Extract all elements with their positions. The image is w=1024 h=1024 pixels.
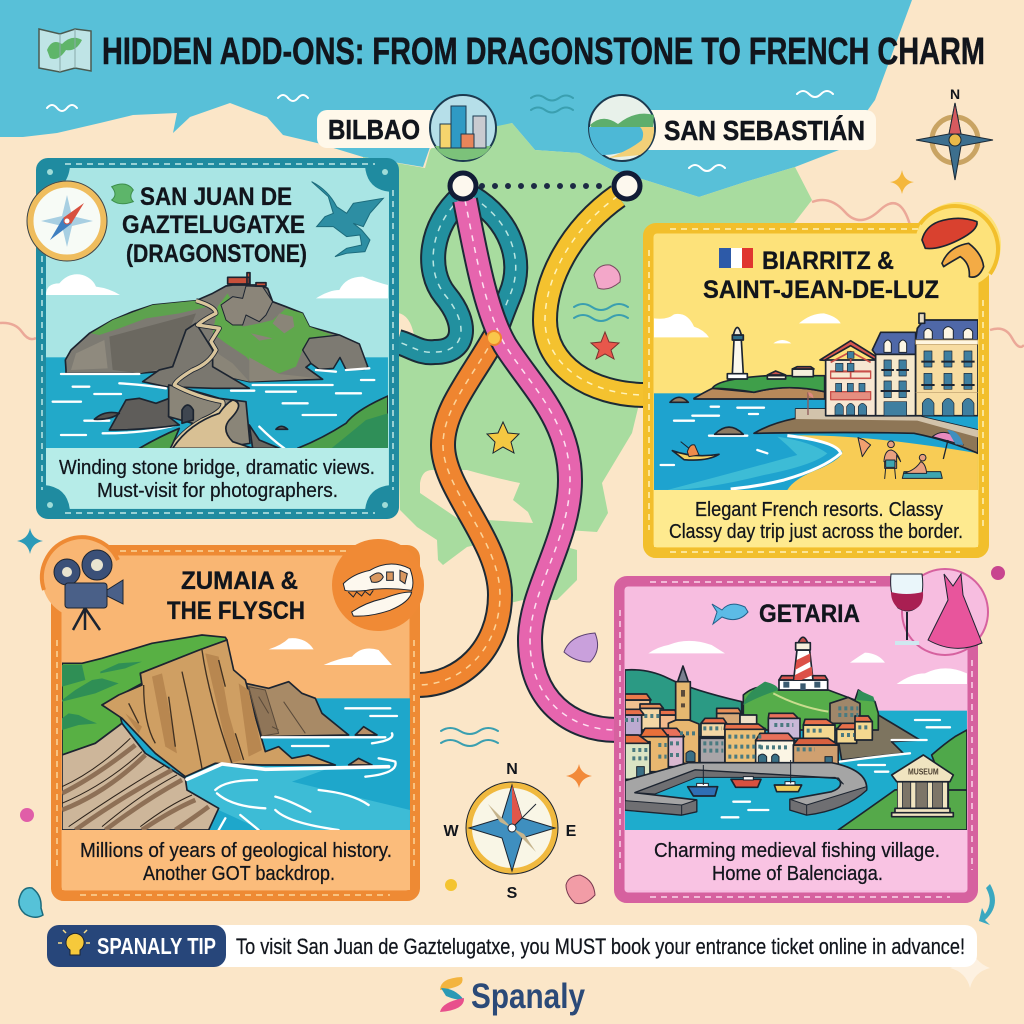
heading: SAN JUAN DE — [140, 183, 292, 211]
illustration: fishing village — [625, 637, 967, 831]
roads — [398, 196, 646, 730]
heading — [703, 247, 939, 304]
caption band — [625, 830, 967, 890]
icon: folded map — [39, 29, 91, 72]
illustration: island and bridge — [46, 273, 388, 451]
caption band — [46, 448, 388, 508]
heading — [122, 183, 307, 268]
heading: SAINT-JEAN-DE-LUZ — [703, 276, 939, 304]
panel: Biarritz and Saint-Jean-de-Luz — [644, 202, 1001, 557]
region border lines — [0, 200, 1024, 347]
caption: Home of Balenciaga. — [712, 863, 883, 885]
illustration: French resort — [654, 313, 978, 490]
tip label: SPANALY TIP — [97, 933, 216, 959]
icon: teal dragon — [312, 182, 383, 257]
sea — [0, 0, 912, 197]
icon: small green dragon — [112, 184, 133, 204]
panel: Getaria — [615, 577, 977, 902]
caption — [654, 840, 940, 885]
logo: Spanaly — [471, 977, 585, 1016]
node: San Sebastian — [614, 173, 640, 199]
compass letters: E — [566, 823, 577, 840]
caption: Classy day trip just across the border. — [669, 521, 963, 543]
road: orange to Zumaia — [418, 338, 500, 685]
caption band — [654, 490, 978, 547]
icon: gold star — [487, 422, 519, 453]
icon: Bilbao city — [430, 95, 496, 161]
corner ornaments — [44, 166, 391, 511]
node: Bilbao — [450, 173, 476, 199]
icon: compass rose NE — [916, 86, 993, 180]
icon: wine glass and dress — [891, 569, 988, 655]
heading: GAZTELUGATXE — [122, 211, 305, 239]
icon: compass rose NE: N — [950, 86, 960, 102]
compass letters: S — [507, 885, 518, 902]
heading: GETARIA — [759, 600, 860, 628]
label: San Sebastian — [640, 110, 876, 150]
compass letters — [443, 761, 577, 902]
compass letters: W — [443, 823, 459, 840]
dotted link between cities — [482, 183, 610, 189]
icon: starfish — [591, 332, 619, 359]
icon: camera badge backing — [42, 538, 122, 618]
caption — [80, 840, 392, 885]
icon: fish — [712, 604, 748, 624]
heading: BIARRITZ & — [762, 247, 894, 275]
panel: San Juan de Gaztelugatxe — [37, 159, 398, 518]
sparkle orange — [566, 764, 592, 788]
icon: large compass — [466, 782, 558, 874]
heading — [167, 567, 305, 625]
icon: little fish mark — [19, 888, 43, 917]
sparkle teal — [17, 528, 43, 554]
caption: Must-visit for photographers. — [97, 480, 338, 502]
icon: scallop shell pink — [594, 265, 620, 289]
heading: ZUMAIA & — [181, 567, 298, 595]
wave marks — [47, 91, 833, 746]
icon: pink shell bottom — [566, 875, 595, 904]
compass letters: N — [506, 761, 518, 778]
green land — [363, 123, 812, 603]
road: yellow to Biarritz — [545, 196, 646, 395]
heading: (DRAGONSTONE) — [126, 240, 307, 268]
icon: purple shell — [564, 633, 598, 662]
road: pink to Getaria — [465, 200, 617, 730]
dot pink — [20, 808, 34, 822]
dot yellow — [445, 879, 457, 891]
icon: compass — [27, 181, 107, 261]
tip bar — [47, 925, 977, 967]
label: Bilbao: BILBAO — [328, 114, 420, 145]
road junction — [487, 331, 501, 345]
icon: beret and croissant — [915, 202, 1001, 288]
caption band — [62, 830, 410, 890]
caption: Charming medieval fishing village. — [654, 840, 940, 862]
icon: French flag — [719, 248, 753, 268]
dot pink — [991, 566, 1005, 580]
icon: film camera — [42, 537, 123, 630]
icon: San Sebastian bay — [589, 95, 655, 161]
caption — [59, 457, 375, 502]
icon: dinosaur skull — [332, 539, 424, 631]
icon: teal curved arrow — [979, 884, 995, 925]
heading: THE FLYSCH — [167, 597, 305, 625]
caption — [669, 499, 963, 543]
caption: Elegant French resorts. Classy — [695, 499, 943, 521]
road: teal right loop — [472, 197, 516, 338]
road: teal to Dragonstone — [398, 197, 462, 352]
panel: Zumaia and the Flysch — [42, 538, 419, 900]
label: San Sebastian: SAN SEBASTIÁN — [664, 115, 865, 146]
caption: Another GOT backdrop. — [143, 863, 335, 885]
caption: Winding stone bridge, dramatic views. — [59, 457, 375, 479]
cream patches — [398, 313, 533, 523]
icon: light bulb — [58, 930, 90, 955]
logo — [440, 977, 585, 1016]
caption: Millions of years of geological history. — [80, 840, 392, 862]
illustration: fishing village: MUSEUM — [908, 768, 939, 777]
sparkle — [890, 170, 914, 194]
illustration: cliffs — [62, 635, 410, 832]
faint sparkle — [950, 945, 990, 988]
